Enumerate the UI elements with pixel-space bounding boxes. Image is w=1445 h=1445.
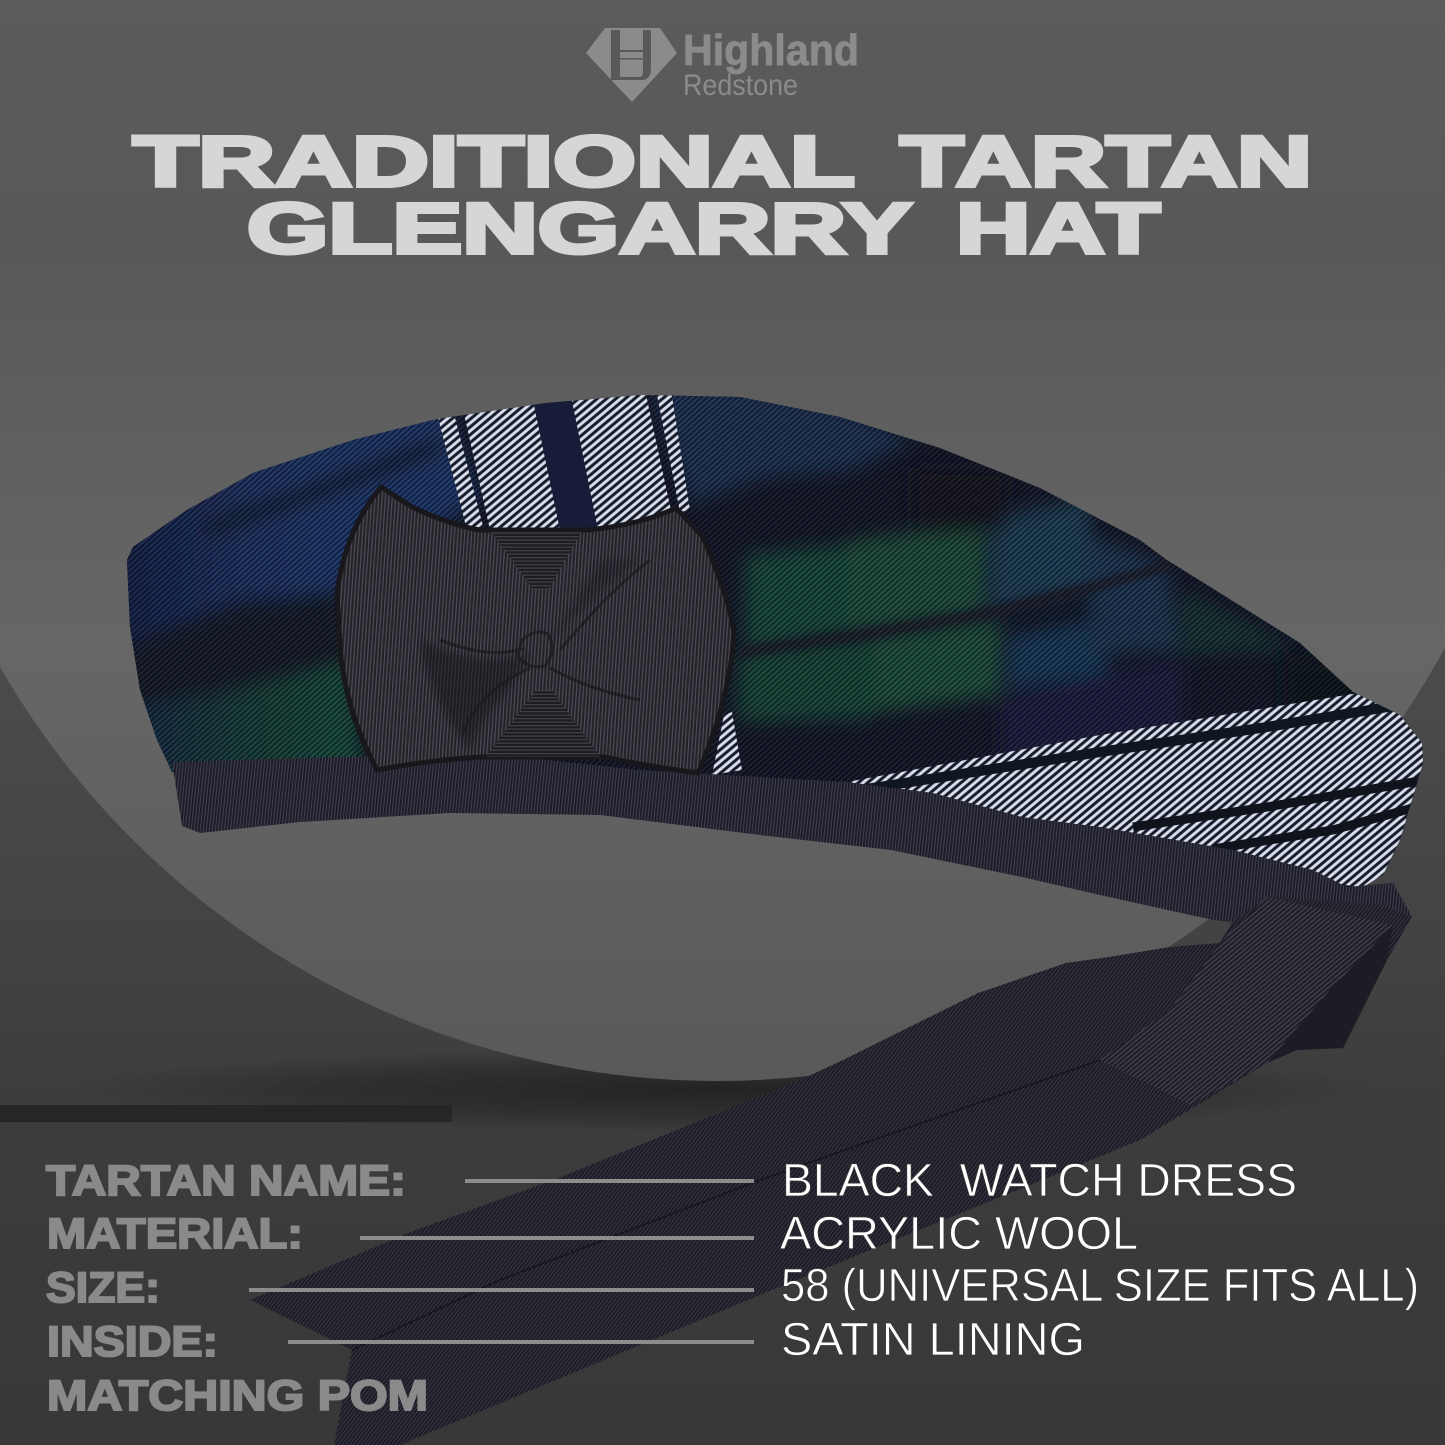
- headband: [172, 755, 1412, 922]
- background: large light disc: [0, 0, 1445, 1081]
- label: tartan name: TARTAN NAME:: [46, 1157, 406, 1205]
- connector lines: [249, 1181, 754, 1342]
- left blue panel: [115, 405, 480, 648]
- lower left green panel: [125, 662, 365, 785]
- twill texture: [127, 395, 1354, 887]
- tartan crown: [110, 380, 1440, 900]
- label: inside: INSIDE:: [47, 1318, 218, 1366]
- blue teal panels: [990, 498, 1090, 610]
- value: tartan name: BLACK WATCH DRESS: [782, 1154, 1297, 1206]
- hat: [110, 380, 1440, 1445]
- title: TRADITIONAL: [133, 123, 855, 202]
- bow lower centre fold: [486, 690, 600, 757]
- bow: [337, 487, 734, 773]
- specification values: [780, 1154, 1419, 1365]
- front ribbon fold: [1100, 897, 1393, 1105]
- logo: Highland Redstone: [586, 26, 859, 102]
- logo icon: diamond with HJ monogram: [586, 28, 677, 102]
- label: material: MATERIAL:: [47, 1210, 303, 1258]
- lower navy panel: [1000, 660, 1183, 765]
- value: inside: SATIN LINING: [781, 1313, 1085, 1365]
- logo wordmark: Redstone: Redstone: [683, 69, 798, 102]
- label: size: SIZE:: [46, 1264, 160, 1312]
- title: [133, 123, 1312, 269]
- title: HAT: [956, 190, 1160, 269]
- darker under tail: [1267, 925, 1393, 1063]
- dark patches: [913, 468, 1007, 535]
- ribbon seam: [352, 1060, 1100, 1350]
- label: matching pom: MATCHING POM: [47, 1372, 428, 1420]
- title: TARTAN: [900, 123, 1312, 202]
- value: material: ACRYLIC WOOL: [780, 1207, 1138, 1259]
- background: soft shadow under the disc: [60, 1048, 1380, 1132]
- bow body: [337, 487, 734, 773]
- back ribbon tail: [250, 883, 1412, 1445]
- ribbon tails: [250, 883, 1412, 1445]
- bow shading and folds: [420, 531, 640, 757]
- bow upper centre fold: [490, 531, 582, 590]
- left dark panel: [132, 600, 338, 704]
- central greens: [745, 545, 847, 648]
- right dark green panel: [1180, 590, 1283, 655]
- title: GLENGARRY: [247, 190, 912, 269]
- right white band: [847, 694, 1423, 886]
- bow knot creases: [440, 560, 650, 735]
- dark bar above the specification list: [0, 1105, 452, 1122]
- value: size: 58 (UNIVERSAL SIZE FITS ALL): [781, 1259, 1419, 1311]
- top white stripes: [436, 390, 690, 530]
- specification labels: [46, 1157, 428, 1420]
- small white stripe beside the bow: [712, 712, 742, 775]
- logo wordmark: Highland: Highland: [683, 26, 859, 75]
- upper navy panel: [650, 385, 915, 505]
- thin dark overcheck: [740, 565, 1170, 652]
